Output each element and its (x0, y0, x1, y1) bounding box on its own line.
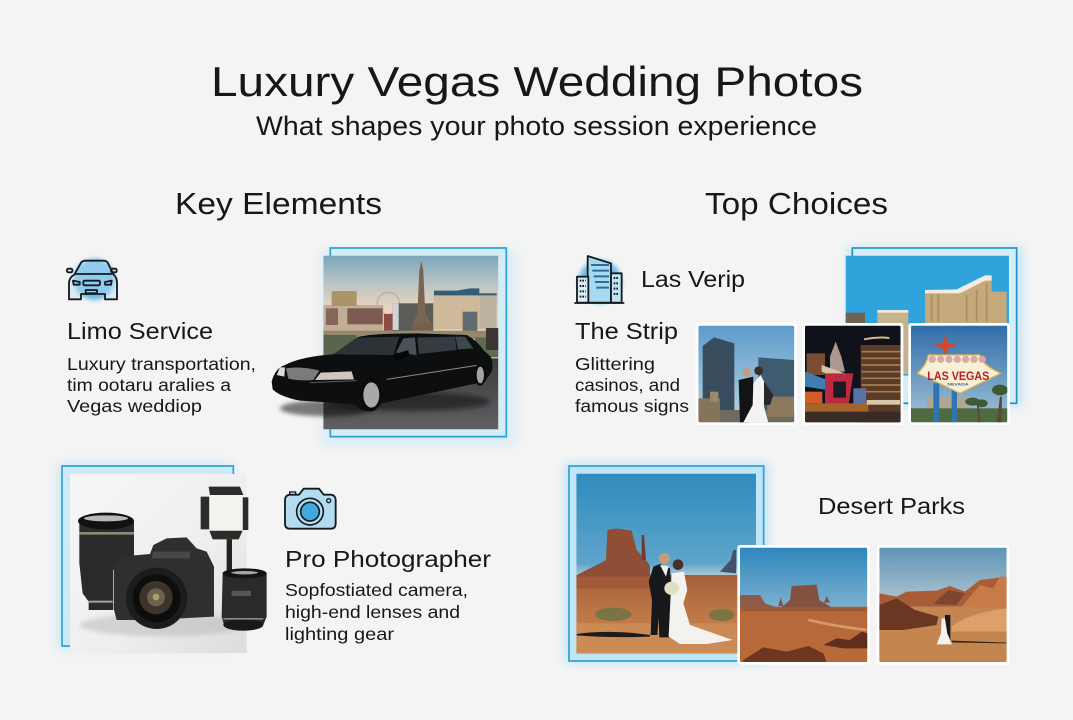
text: limo description: Vegas weddiop (67, 396, 202, 416)
panel: limo service (67, 248, 517, 447)
photo: limo on the strip (272, 248, 517, 447)
heading: the strip: The Strip (575, 318, 678, 344)
heading: pro photographer: Pro Photographer (285, 546, 491, 572)
text: strip description: casinos, and (575, 375, 680, 395)
panel: pro photographer (57, 463, 491, 653)
text: photographer description: high-end lenses and (285, 602, 460, 622)
text: photographer description: Sopfostiated camera, (285, 580, 468, 600)
tile 2 (805, 326, 901, 422)
panel: the strip (574, 247, 1023, 425)
text: photographer description (285, 580, 468, 644)
panel: desert parks (565, 463, 1009, 665)
text: strip description: famous signs (575, 396, 689, 416)
text: limo description (67, 354, 256, 416)
text: limo description: Luxury transportation, (67, 354, 256, 374)
tile 1 (696, 323, 797, 425)
label: desert parks: Desert Parks (818, 493, 965, 519)
label: las verip: Las Verip (641, 266, 745, 292)
lens (79, 522, 134, 610)
icon: camera (285, 489, 336, 529)
photo: camera gear (57, 463, 267, 653)
text: strip description (575, 354, 689, 416)
text: strip description: Glittering (575, 354, 655, 374)
icon: car (67, 259, 117, 300)
heading: limo service: Limo Service (67, 318, 213, 344)
camera (114, 537, 214, 620)
light (227, 539, 232, 571)
subtitle: What shapes your photo session experience (256, 111, 817, 141)
heading: key elements: Key Elements (175, 186, 382, 221)
text: photographer description: lighting gear (285, 624, 394, 644)
right lens (222, 573, 267, 625)
title: Luxury Vegas Wedding Photos (211, 58, 863, 105)
tile 3: LAS VEGAS (927, 369, 989, 383)
heading: top choices: Top Choices (705, 186, 888, 221)
photo collage: desert (565, 463, 1009, 665)
tile 3 (911, 326, 1008, 422)
icon: city buildings (574, 256, 624, 303)
tile 3: NEVADA (947, 383, 969, 387)
text: limo description: tim ootaru aralies a (67, 375, 231, 395)
photo collage: strip (696, 247, 1023, 425)
